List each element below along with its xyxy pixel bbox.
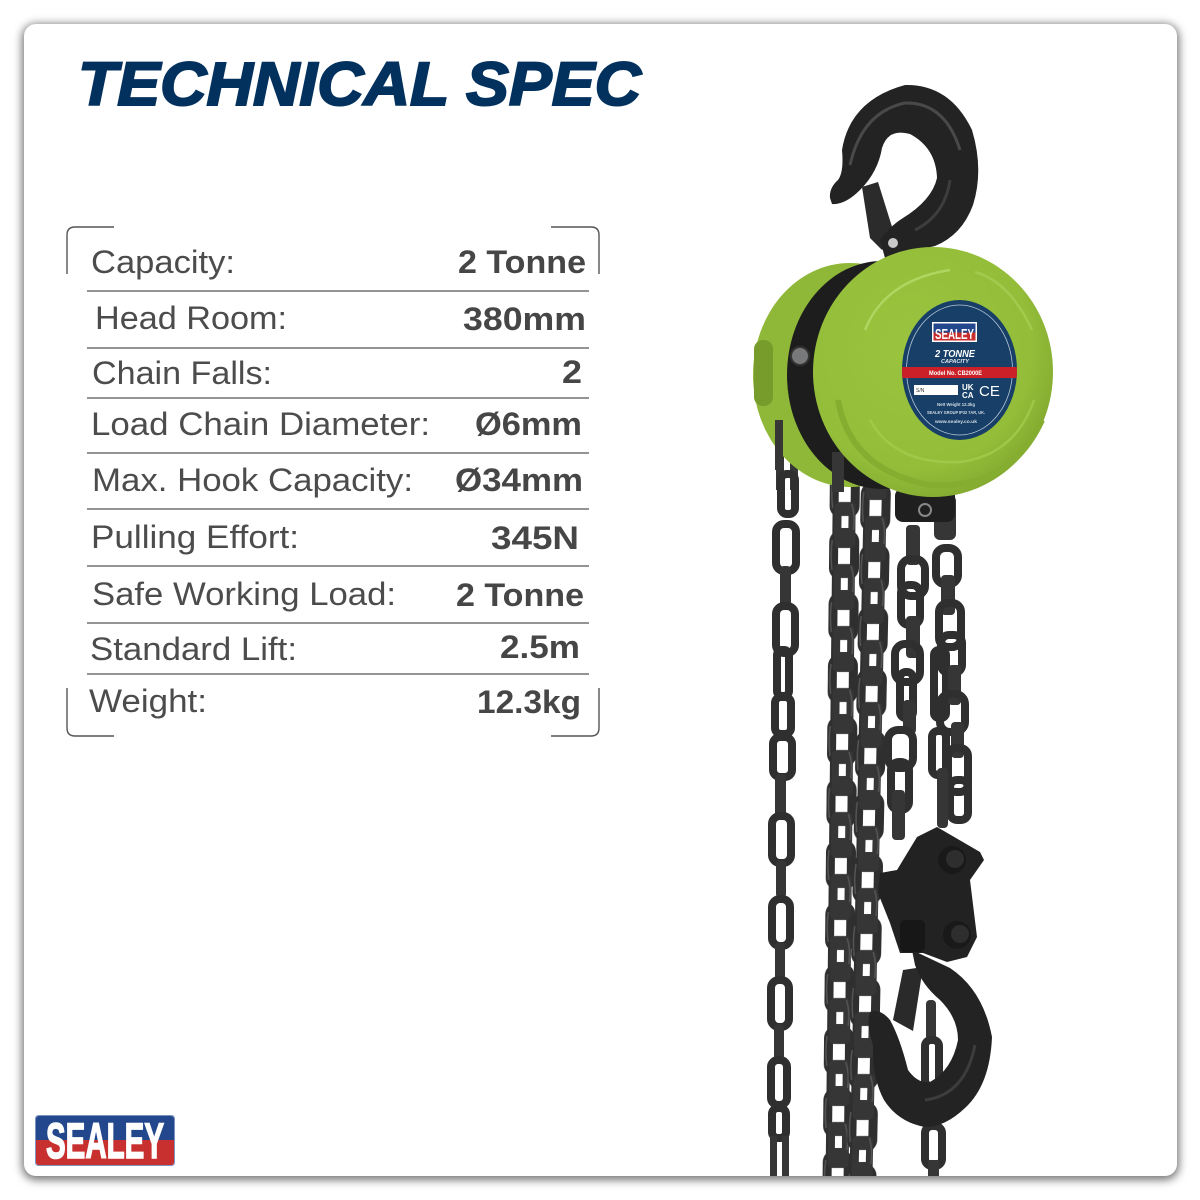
row: weight: Weight: xyxy=(89,683,207,719)
chain strand 1 xyxy=(770,420,798,1178)
product label xyxy=(900,300,1020,440)
row: safe working load xyxy=(92,576,584,613)
brand logo: SEALEY xyxy=(46,1113,164,1169)
specification table xyxy=(67,227,599,736)
product illustration: chain hoist xyxy=(753,85,1053,1180)
row: pulling effort: 345N xyxy=(491,520,579,556)
row: max hook capacity xyxy=(92,462,583,498)
row: chain falls: Chain Falls: xyxy=(92,355,272,391)
label details: Nett Weight 12.3kg xyxy=(937,402,975,407)
row: chain falls xyxy=(92,354,582,391)
chain entries over drum xyxy=(775,420,844,492)
bolt top xyxy=(938,846,966,874)
product label: CAPACITY xyxy=(941,359,970,365)
chain strand 3 xyxy=(846,484,891,1180)
bracket: top left xyxy=(67,227,114,274)
label details: SEALEY GROUP IP32 7AR, UK. xyxy=(927,410,985,415)
row: head room: Head Room: xyxy=(95,300,287,336)
row: pulling effort: Pulling Effort: xyxy=(91,519,299,555)
chain guide block xyxy=(895,488,955,522)
chain slot xyxy=(754,340,773,406)
row: head room: 380mm xyxy=(463,301,586,337)
lower hook xyxy=(869,950,992,1127)
label logo: SEALEY xyxy=(935,326,974,343)
bracket: top right xyxy=(551,227,599,274)
row: weight xyxy=(89,683,581,720)
row: standard lift xyxy=(90,629,580,667)
row: standard lift: 2.5m xyxy=(500,629,580,665)
bracket: bottom right xyxy=(551,688,599,736)
top hook xyxy=(830,85,978,258)
label marks: UK xyxy=(962,383,974,392)
chain strand 5 xyxy=(932,495,968,828)
bolt bottom xyxy=(943,921,971,949)
row: max hook capacity: Ø34mm xyxy=(455,462,583,498)
row: weight: 12.3kg xyxy=(477,684,581,720)
row: chain falls: 2 xyxy=(562,354,582,390)
title: TECHNICAL SPEC xyxy=(78,50,642,118)
row: safe working load: 2 Tonne xyxy=(456,577,584,613)
row: head room xyxy=(95,300,586,337)
row: pulling effort xyxy=(91,519,579,556)
nut xyxy=(791,347,809,365)
row: load chain diameter: Ø6mm xyxy=(475,406,582,442)
front drum xyxy=(813,247,1053,497)
label marks: CE xyxy=(979,383,1000,400)
row: max hook capacity: Max. Hook Capacity: xyxy=(92,462,413,498)
chain strand 2 xyxy=(823,470,860,1180)
label details: www.sealey.co.uk xyxy=(934,419,978,424)
row: capacity xyxy=(91,244,586,280)
label marks: CA xyxy=(962,391,974,400)
lower chain behind hook xyxy=(925,1000,942,1180)
product label: Model No. CB2000E xyxy=(929,371,982,377)
label capacity: 2 TONNE xyxy=(934,349,975,360)
back drum xyxy=(753,261,890,489)
row: capacity: 2 Tonne xyxy=(458,244,586,280)
label red band xyxy=(900,367,1020,378)
label serial box: S/N xyxy=(916,388,925,394)
pulley block xyxy=(878,827,984,962)
row: capacity: Capacity: xyxy=(91,244,235,280)
brand logo xyxy=(36,1113,174,1169)
bracket: bottom left xyxy=(67,688,114,736)
row: load chain diameter: Load Chain Diameter: xyxy=(91,406,430,442)
row: load chain diameter xyxy=(91,406,582,442)
row: safe working load: Safe Working Load: xyxy=(92,576,396,612)
label details xyxy=(927,402,985,424)
label marks xyxy=(962,384,1000,398)
row: standard lift: Standard Lift: xyxy=(90,631,297,667)
chain strand 4 xyxy=(888,525,925,840)
